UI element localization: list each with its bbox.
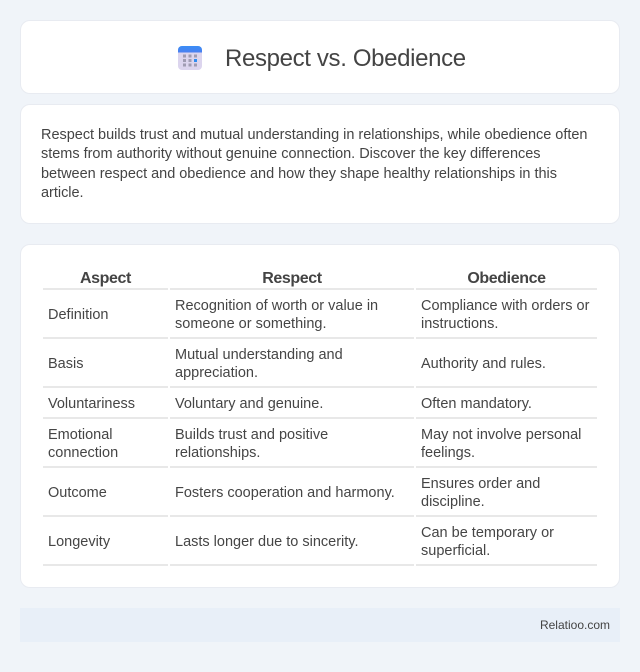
icon: calendar bbox=[178, 46, 202, 70]
cell: appreciation. bbox=[175, 365, 258, 381]
table header: Obedience: Obedience bbox=[467, 270, 546, 287]
intro text: between respect and obedience and how they shape healthy relationships in this bbox=[41, 166, 557, 182]
cell: superficial. bbox=[421, 543, 490, 559]
row: Emotional connection bbox=[48, 427, 118, 461]
cell: Authority and rules. bbox=[421, 356, 546, 372]
cell bbox=[421, 298, 590, 332]
cell: feelings. bbox=[421, 445, 475, 461]
cell: Builds trust and positive bbox=[175, 427, 328, 443]
cell: Compliance with orders or bbox=[421, 298, 589, 314]
heading: Respect vs. Obedience bbox=[225, 45, 466, 72]
cell bbox=[175, 427, 328, 461]
cell bbox=[175, 298, 378, 332]
cell: Mutual understanding and bbox=[175, 347, 343, 363]
cell: Voluntary and genuine. bbox=[175, 396, 323, 412]
cell: relationships. bbox=[175, 445, 260, 461]
table header: Aspect: Aspect bbox=[80, 270, 131, 287]
intro text bbox=[41, 126, 587, 201]
row: Longevity: Longevity bbox=[48, 534, 110, 550]
cell bbox=[421, 525, 554, 559]
cell: Fosters cooperation and harmony. bbox=[175, 485, 395, 501]
cell: instructions. bbox=[421, 316, 498, 332]
cell: May not involve personal bbox=[421, 427, 581, 443]
cell: Ensures order and bbox=[421, 476, 540, 492]
comparison table card bbox=[20, 244, 620, 588]
cell: someone or something. bbox=[175, 316, 327, 332]
row: Emotional connection: connection bbox=[48, 445, 118, 461]
row: Definition: Definition bbox=[48, 307, 108, 323]
cell: Lasts longer due to sincerity. bbox=[175, 534, 358, 550]
row: Outcome: Outcome bbox=[48, 485, 107, 501]
cell: discipline. bbox=[421, 494, 485, 510]
cell bbox=[421, 476, 540, 510]
cell: Often mandatory. bbox=[421, 396, 532, 412]
row: Voluntariness: Voluntariness bbox=[48, 396, 135, 412]
title card bbox=[20, 20, 620, 94]
intro text: Respect builds trust and mutual understanding in relationships, while obedience often bbox=[41, 126, 587, 142]
cell bbox=[175, 347, 343, 381]
intro text: article. bbox=[41, 185, 84, 201]
footer text: Relatioo.com bbox=[540, 618, 610, 632]
row: Basis: Basis bbox=[48, 356, 83, 372]
table header: Respect: Respect bbox=[262, 270, 322, 287]
footer bar bbox=[20, 608, 620, 642]
cell bbox=[421, 427, 581, 461]
intro card bbox=[20, 104, 620, 224]
cell: Recognition of worth or value in bbox=[175, 298, 378, 314]
intro text: stems from authority without genuine connection. Discover the key differences bbox=[41, 146, 541, 162]
cell: Can be temporary or bbox=[421, 525, 554, 541]
row: Emotional connection: Emotional bbox=[48, 427, 112, 443]
